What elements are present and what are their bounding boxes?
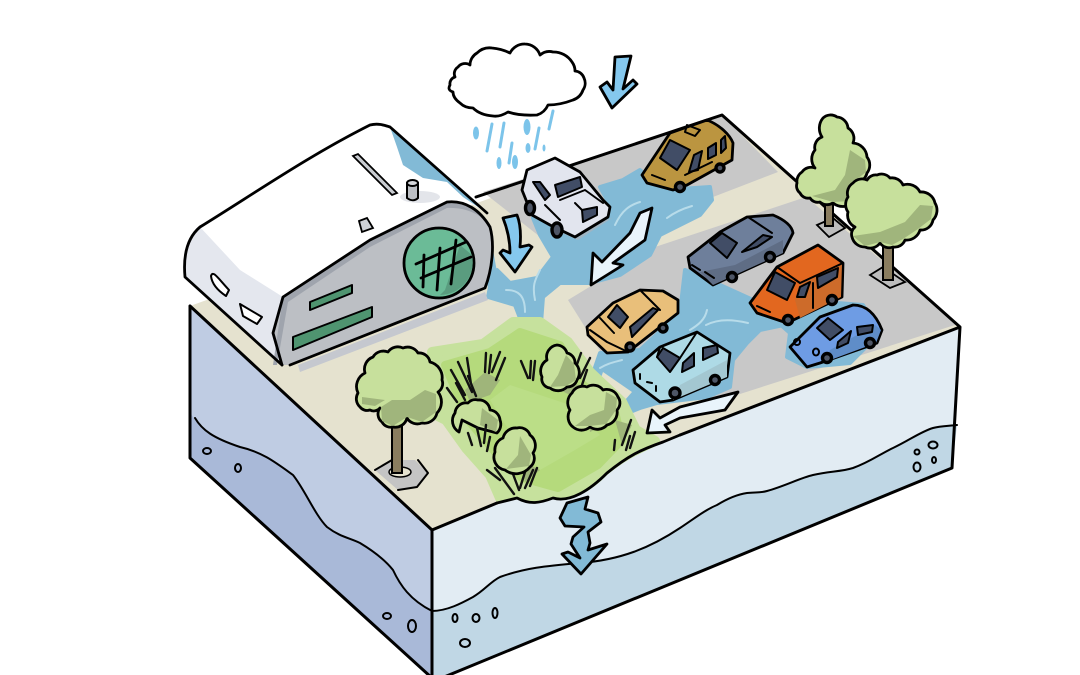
left soil face bbox=[190, 306, 432, 675]
tree: garden left bbox=[356, 347, 443, 490]
car: gold van bbox=[642, 120, 733, 192]
block outlines bbox=[190, 115, 960, 675]
car: pale blue SUV bbox=[633, 332, 730, 402]
icon: white flow arrow in parking lot bbox=[591, 208, 652, 285]
car: peach sedan bbox=[587, 290, 678, 353]
green wall panels bbox=[293, 285, 372, 350]
bush D bbox=[494, 428, 535, 474]
panel: parked cars bbox=[522, 120, 882, 402]
right soil face bbox=[432, 327, 960, 675]
ripple lines bbox=[506, 202, 748, 368]
parking lot paving bbox=[483, 115, 958, 400]
icon: infiltration squiggle arrow bbox=[560, 497, 607, 574]
skylight bbox=[353, 154, 397, 195]
front gable wall bbox=[273, 202, 492, 365]
building outline bbox=[185, 124, 487, 365]
bush B bbox=[568, 385, 620, 430]
side windows bbox=[211, 274, 262, 324]
bush A bbox=[541, 345, 579, 391]
roof bbox=[185, 125, 487, 365]
car: slate sedan bbox=[688, 215, 793, 285]
panel: ground block bbox=[190, 115, 960, 675]
car: white jeep bbox=[522, 158, 612, 240]
panel: rain garden vegetation bbox=[432, 322, 680, 503]
bush C bbox=[452, 400, 501, 451]
car: blue hatchback bbox=[790, 305, 882, 367]
pebbles bbox=[452, 442, 938, 647]
roof box bbox=[359, 218, 373, 232]
tree: right rear bbox=[797, 115, 870, 237]
rain drops bbox=[487, 111, 553, 163]
round window bbox=[404, 228, 474, 298]
panel: stormwater on the pavement bbox=[485, 170, 880, 417]
icon: white flow arrow into garden bbox=[647, 392, 738, 433]
panel: trees bbox=[356, 115, 937, 490]
grass tufts bbox=[447, 352, 635, 494]
tree: right front bbox=[846, 174, 937, 288]
side shade bbox=[185, 227, 283, 365]
front edge of garden bbox=[497, 435, 680, 503]
roof water bbox=[390, 127, 487, 213]
pavement patch beside rain garden bbox=[596, 372, 632, 408]
icon: blue roof runoff arrow bbox=[500, 215, 532, 272]
top surface bbox=[190, 115, 960, 530]
roof vent bbox=[400, 180, 440, 203]
panel: building with green roof panel bbox=[185, 124, 492, 372]
icon: blue rainfall arrow bbox=[600, 56, 637, 108]
icon: rain cloud bbox=[449, 44, 585, 169]
car: orange van bbox=[750, 245, 843, 324]
